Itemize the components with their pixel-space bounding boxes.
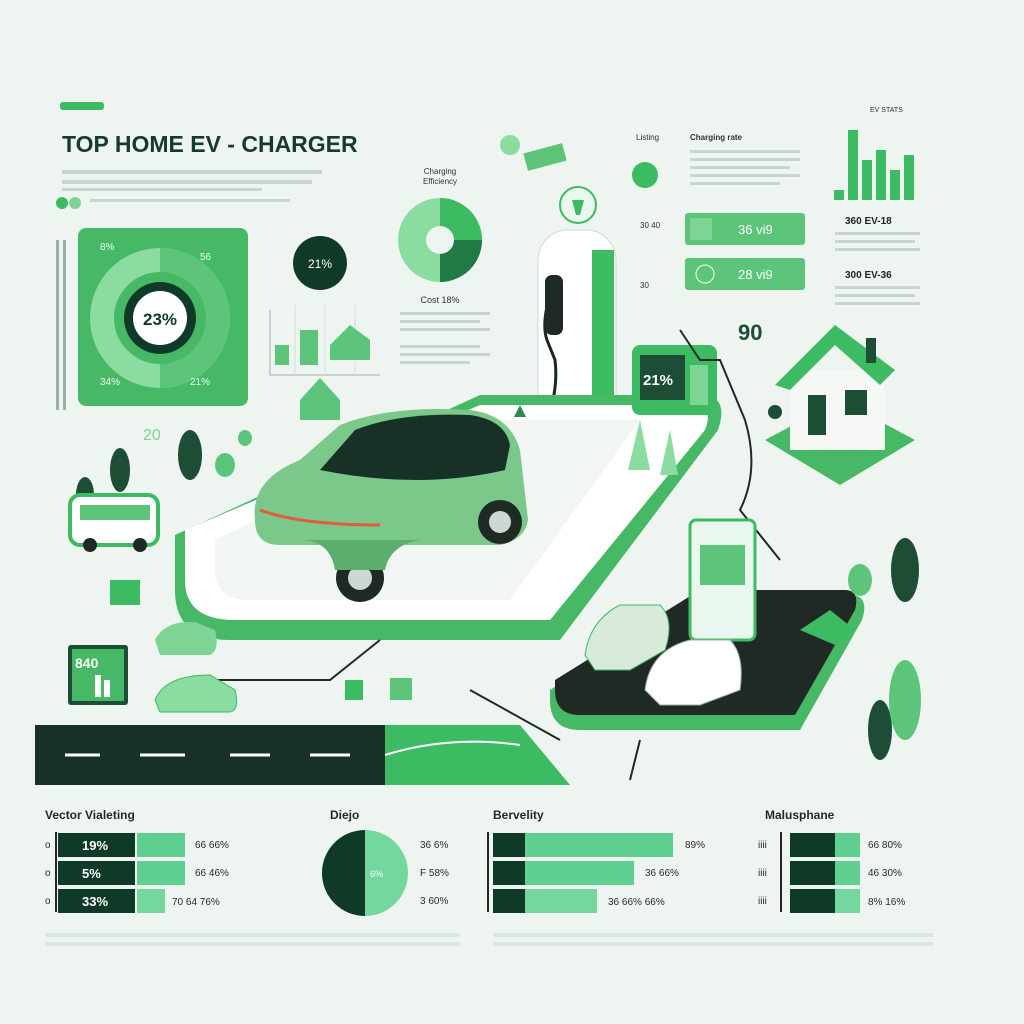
bus: [70, 495, 158, 552]
dark parking platform: [550, 520, 864, 730]
section: bottom col3: [487, 808, 705, 913]
text block middle: [400, 312, 490, 364]
section: bottom col1: [45, 808, 229, 913]
green stat boxes: 36 vi9: [738, 222, 773, 237]
section: bottom col1: 5%: [82, 866, 101, 881]
panel: donut: 34%: [100, 377, 120, 388]
trees: [76, 430, 919, 760]
section: bottom col1: 70 64 76%: [172, 897, 220, 908]
billboard: [68, 645, 128, 705]
section: bottom col3: Bervelity: [493, 808, 544, 822]
charger station: [525, 230, 616, 581]
section: bottom col1: o: [45, 840, 51, 851]
section: bottom col4: 8% 16%: [868, 897, 905, 908]
section: bottom col4: [758, 808, 905, 913]
small house left: [300, 378, 340, 420]
pie top: Cost 18%: [420, 295, 460, 305]
section: bottom col3: 36 66%: [645, 868, 679, 879]
section: pie bottom: [322, 808, 449, 916]
road: [35, 725, 570, 785]
text: 90: [738, 320, 762, 345]
green stat boxes: 30 40: [640, 221, 661, 230]
section: bottom col4: 66 80%: [868, 840, 902, 851]
section: bottom col1: 66 46%: [195, 868, 229, 879]
panel: donut: 56: [200, 252, 212, 263]
icon: top charger boxes: [500, 135, 567, 171]
section: bottom col1: o: [45, 896, 51, 907]
green stat boxes: 30: [640, 281, 649, 290]
display sign: 21%: [643, 372, 673, 389]
green stat boxes: 28 vi9: [738, 267, 773, 282]
billboard: 840: [75, 655, 99, 671]
right text blocks: 360 EV-18: [845, 216, 892, 227]
panel: donut: 23%: [143, 310, 177, 329]
small dark donut: [293, 236, 347, 290]
pie top: Charging: [424, 167, 456, 176]
small cars left: [110, 580, 412, 712]
section: bottom col1: Vector Vialeting: [45, 808, 135, 822]
section: bottom col1: 19%: [82, 838, 108, 853]
section: pie bottom: 6%: [370, 869, 383, 879]
section: bottom col1: 33%: [82, 894, 108, 909]
right text blocks: [835, 216, 920, 305]
section: bottom col4: iiii: [758, 868, 767, 879]
text: EV STATS: [870, 107, 903, 114]
text: 20: [143, 427, 161, 444]
right text blocks: 300 EV-36: [845, 270, 892, 281]
section: pie bottom: 3 60%: [420, 896, 448, 907]
section: bottom col4: iiii: [758, 896, 767, 907]
section: bottom col1: 66 66%: [195, 840, 229, 851]
pie top: Efficiency: [423, 177, 457, 186]
section: bottom col1: o: [45, 868, 51, 879]
green stat boxes: [632, 133, 805, 290]
section: bottom col4: Malusphane: [765, 808, 835, 822]
section: bottom col4: iiii: [758, 840, 767, 851]
green stat boxes: Listing: [636, 133, 659, 142]
section: bottom col4: 46 30%: [868, 868, 902, 879]
side label: [56, 240, 66, 410]
header tag: [60, 102, 104, 110]
panel: donut: 8%: [100, 242, 115, 253]
icon: bulb: [560, 187, 596, 223]
car: [255, 409, 528, 602]
small dark donut: 21%: [308, 257, 332, 271]
display sign: [632, 345, 717, 415]
paths: [200, 330, 780, 780]
title: TOP HOME EV - CHARGER: [62, 131, 358, 157]
cones: [514, 405, 678, 475]
bar chart top right: [834, 130, 914, 200]
intro text: [62, 170, 322, 202]
panel: donut: 21%: [190, 377, 210, 388]
small chart: [270, 305, 380, 375]
section: bottom col3: 89%: [685, 840, 705, 851]
green stat boxes: Charging rate: [690, 133, 743, 142]
pie top: [398, 167, 482, 305]
section: pie bottom: 36 6%: [420, 840, 448, 851]
section: bottom col3: 36 66% 66%: [608, 897, 665, 908]
section: pie bottom: F 58%: [420, 868, 449, 879]
footer text: [45, 933, 933, 946]
section: pie bottom: Diejo: [330, 808, 359, 822]
platform: [175, 395, 721, 640]
house: [765, 325, 915, 485]
dots: [56, 197, 81, 209]
panel: donut: [78, 228, 248, 406]
